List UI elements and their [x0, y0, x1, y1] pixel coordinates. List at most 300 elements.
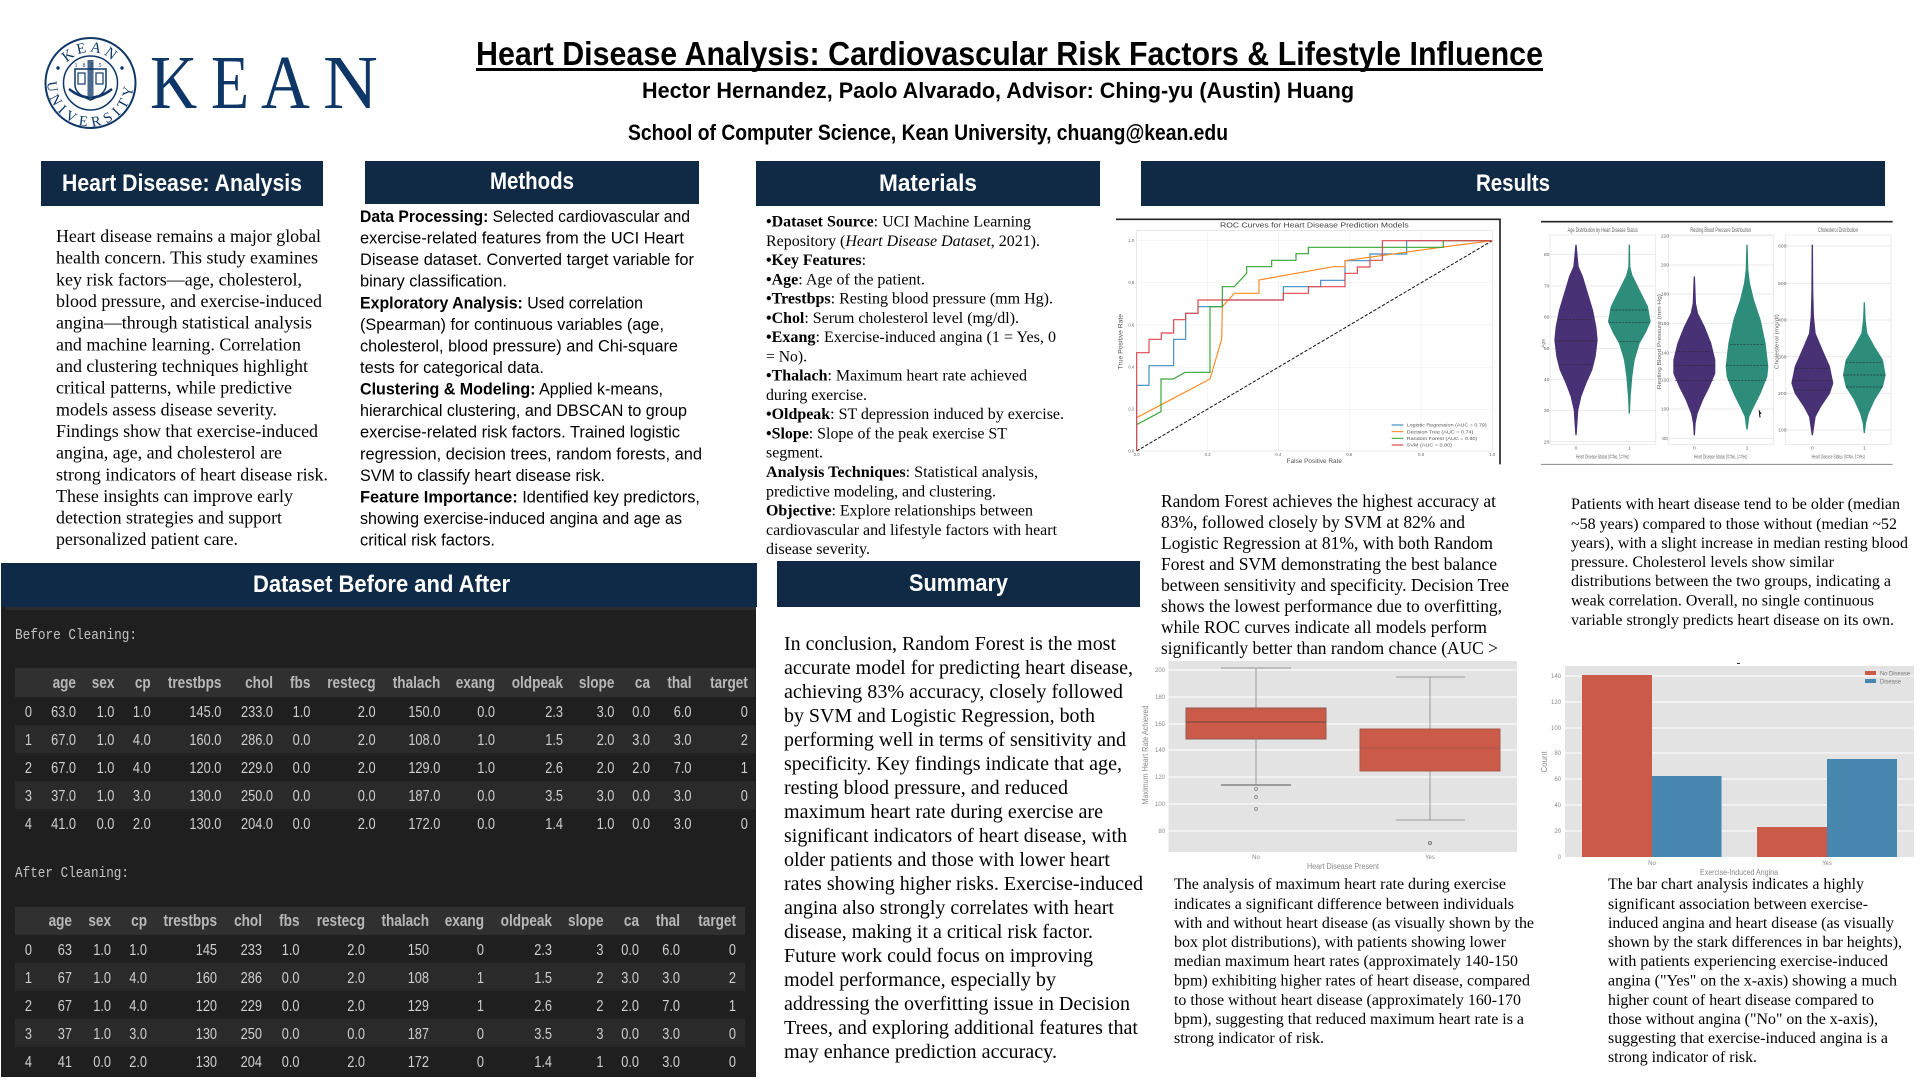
- chart: violin plots: 30: [1544, 408, 1550, 414]
- table: before cleaning: 0.0: [358, 788, 376, 805]
- table: before cleaning: 2: [25, 760, 32, 777]
- icon: university seal: 1855: [74, 63, 106, 69]
- table: before cleaning: 160.0: [189, 732, 221, 749]
- table: after cleaning: 130: [196, 1026, 217, 1043]
- table: before cleaning: 0.0: [632, 816, 650, 833]
- violin: cholesterol no disease: [1792, 245, 1833, 435]
- text block: introduction: angina, age, and cholesterol are: [56, 443, 282, 463]
- heading: Materials: Materials: [879, 170, 977, 197]
- text block: bar chart commentary: The bar chart analysis indicates a highly: [1608, 876, 1864, 893]
- chart: violin plots: 1: [1628, 445, 1631, 451]
- text block: box plot commentary: bpm) exhibiting higher rates of heart disease, compared: [1174, 972, 1530, 990]
- wordmark: [150, 40, 378, 125]
- table: after cleaning: 2.3: [534, 942, 552, 959]
- chart: box plot of maximum heart rate: 180: [1155, 695, 1166, 701]
- table: before cleaning: 0.0: [293, 732, 310, 749]
- table: after cleaning: 0.0: [282, 1054, 300, 1071]
- table: before cleaning: 4: [25, 816, 32, 833]
- table: after cleaning: 150: [408, 942, 429, 959]
- table: before cleaning: 2.0: [358, 816, 376, 833]
- chart: box plot of maximum heart rate: 120: [1155, 775, 1166, 781]
- curve: SVM: [1137, 241, 1492, 451]
- table: after cleaning: 0.0: [282, 998, 300, 1015]
- table: before cleaning: 4.0: [133, 760, 151, 777]
- table: after cleaning: 3: [25, 1026, 32, 1043]
- text block: introduction: [56, 226, 328, 549]
- text block: methods: critical risk factors.: [360, 532, 495, 550]
- chart: violin plots: 0: [1575, 445, 1578, 451]
- violin: age disease: [1608, 245, 1650, 413]
- table: before cleaning: 120.0: [189, 760, 221, 777]
- table: after cleaning: 0: [729, 1026, 736, 1043]
- text block: bar chart commentary: [1608, 876, 1902, 1066]
- table: before cleaning: 2.6: [545, 760, 563, 777]
- table: after cleaning: 2.0: [347, 970, 365, 987]
- chart: bar chart of exercise-induced angina: 80: [1554, 751, 1562, 757]
- text block: summary: Trees, and exploring additional features that: [784, 1017, 1138, 1039]
- chart: violin plots: 1: [1863, 445, 1866, 451]
- table: after cleaning: 2: [25, 998, 32, 1015]
- table: after cleaning: 145: [196, 942, 217, 959]
- text block: materials: segment.: [766, 445, 823, 462]
- chart: ROC curves: 0.6: [1346, 452, 1353, 457]
- table: after cleaning: 229: [241, 998, 262, 1015]
- table: before cleaning: 0: [741, 816, 748, 833]
- table: before cleaning: oldpeak: [512, 674, 563, 692]
- text block: bar chart commentary: suggesting that exercise-induced angina is a: [1608, 1030, 1888, 1047]
- table: before cleaning: cp: [135, 674, 151, 692]
- text block: materials: cardiovascular and lifestyle factors with heart: [766, 522, 1058, 539]
- curve: random forest: [1137, 241, 1492, 425]
- table: after cleaning: target: [698, 912, 736, 930]
- text block: bar chart commentary: with patients experiencing exercise-induced: [1608, 953, 1888, 970]
- chart: violin plots: 160: [1661, 321, 1669, 327]
- table: after cleaning: 3.0: [662, 1054, 680, 1071]
- table: before cleaning: 1.0: [477, 732, 495, 749]
- panel: dataset before and after: [1, 563, 757, 1077]
- text block: ROC commentary: shows the lowest performance due to overfitting,: [1161, 596, 1502, 616]
- violin: cholesterol disease: [1843, 303, 1885, 433]
- label: before cleaning: Before Cleaning:: [15, 627, 137, 644]
- table: after cleaning: 130: [196, 1054, 217, 1071]
- chart: box plot of maximum heart rate: [1141, 661, 1517, 871]
- text block: methods: regression, decision trees, random forests, and: [360, 445, 702, 463]
- table: before cleaning: thalach: [393, 674, 440, 692]
- table: before cleaning: 1: [25, 732, 32, 749]
- table: after cleaning: 0.0: [282, 970, 300, 987]
- table: before cleaning: chol: [245, 674, 273, 692]
- chart: box plot of maximum heart rate: Maximum Heart Rate Achieved: [1141, 706, 1150, 804]
- table: after cleaning: 160: [196, 970, 217, 987]
- table: before cleaning: 2.0: [358, 760, 376, 777]
- table: after cleaning: 67: [58, 970, 72, 987]
- text block: methods: binary classification.: [360, 273, 507, 291]
- table: before cleaning: 286.0: [241, 732, 273, 749]
- chart: ROC curves: 0.2: [1128, 407, 1135, 412]
- text block: summary: performing well in terms of sensitivity and: [784, 729, 1126, 751]
- chart: violin plots: 60: [1544, 314, 1550, 320]
- table: before cleaning: 1.0: [133, 704, 151, 721]
- table: after cleaning: exang: [445, 912, 484, 930]
- icon: mouse cursor: [1759, 409, 1762, 417]
- table: before cleaning: 130.0: [189, 788, 221, 805]
- table: after cleaning: chol: [234, 912, 262, 930]
- table: after cleaning: 2: [596, 998, 604, 1015]
- table: after cleaning: age: [49, 912, 72, 930]
- table: after cleaning: 0: [729, 1054, 736, 1071]
- text block: introduction: angina—through statistical analysis: [56, 313, 312, 333]
- text block: summary: addressing the overfitting issue in Decision: [784, 993, 1130, 1015]
- text block: materials: Analysis Techniques: Statistical analysis,: [766, 464, 1038, 481]
- table: before cleaning: 108.0: [408, 732, 440, 749]
- text block: box plot commentary: strong indicator of risk.: [1174, 1030, 1324, 1047]
- text block: violin commentary: [1571, 496, 1908, 629]
- text block: materials: •Slope: Slope of the peak exercise ST: [766, 426, 1007, 442]
- table: after cleaning: 1: [729, 998, 736, 1015]
- text block: summary: resting blood pressure, and reduced: [784, 777, 1068, 799]
- table: after cleaning: 6.0: [662, 942, 680, 959]
- table: before cleaning: restecg: [327, 674, 376, 692]
- table: before cleaning: 0.0: [632, 704, 650, 721]
- violin: blood pressure no disease: [1674, 277, 1715, 435]
- table: after cleaning: 1.4: [534, 1054, 552, 1071]
- table: before cleaning: 1.0: [477, 760, 495, 777]
- text block: bar chart commentary: strong indicator of risk.: [1608, 1049, 1757, 1066]
- table: before cleaning: 3.0: [597, 788, 614, 805]
- chart: box plot of maximum heart rate: Yes: [1425, 855, 1435, 861]
- text block: materials: •Thalach: Maximum heart rate achieved: [766, 368, 1027, 385]
- table: before cleaning: 41.0: [51, 816, 76, 833]
- text block: introduction: and clustering techniques highlight: [56, 356, 308, 376]
- chart: violin plots: 100: [1778, 428, 1787, 434]
- table: before cleaning: age: [53, 674, 76, 692]
- table: after cleaning: 1.0: [129, 942, 147, 959]
- table: before cleaning: 2: [741, 732, 748, 749]
- text block: methods: cholesterol, blood pressure) and Chi-square: [360, 337, 678, 355]
- table: after cleaning: 0: [729, 942, 736, 959]
- text block: summary: [784, 633, 1143, 1063]
- table: after cleaning: 1.0: [93, 942, 111, 959]
- text block: methods: Disease dataset. Converted target variable for: [360, 251, 694, 269]
- table: before cleaning: 3.0: [632, 732, 650, 749]
- text block: ROC commentary: [1161, 491, 1509, 658]
- chart: ROC curves: 0.4: [1275, 452, 1282, 457]
- table: before cleaning: 2.0: [632, 760, 650, 777]
- heading: Materials: [756, 161, 1100, 206]
- text block: box plot commentary: median maximum heart rates (approximately 140-150: [1174, 953, 1518, 970]
- table: after cleaning: fbs: [279, 912, 300, 930]
- text block: materials: [766, 214, 1064, 558]
- text block: violin commentary: Patients with heart disease tend to be older (median: [1571, 496, 1900, 513]
- text block: ROC commentary: Forest and SVM demonstrating the best balance: [1161, 554, 1497, 574]
- chart: bar chart of exercise-induced angina: 140: [1551, 674, 1562, 680]
- chart: violin plots: 180: [1661, 292, 1669, 298]
- chart: ROC curves: 0.4: [1128, 365, 1135, 370]
- chart: violin plots: Cholesterol Distribution: [1818, 227, 1858, 234]
- table: before cleaning: 0.0: [97, 816, 114, 833]
- table: before cleaning: 3: [25, 788, 32, 805]
- table: before cleaning: 1.0: [97, 760, 114, 777]
- curve: logistic regression: [1137, 241, 1492, 451]
- table: before cleaning: 250.0: [241, 788, 273, 805]
- legend: Logistic Regression (AUC = 0.79): [1407, 423, 1487, 428]
- text block: introduction: These insights can improve early: [56, 486, 293, 506]
- text block: methods: Data Processing: Selected cardiovascular and: [360, 208, 690, 226]
- text block: ROC commentary: while ROC curves indicate all models perform: [1161, 617, 1487, 637]
- table: after cleaning: 1.0: [93, 1026, 111, 1043]
- table: before cleaning: 3.0: [674, 732, 692, 749]
- text block: materials: disease severity.: [766, 541, 870, 558]
- table: before cleaning: 7.0: [674, 760, 692, 777]
- chart: violin plots: 80: [1662, 436, 1668, 442]
- legend: [1865, 671, 1911, 686]
- table: after cleaning: thal: [656, 912, 680, 930]
- text block: materials: •Dataset Source: UCI Machine Learning: [766, 214, 1031, 230]
- legend: No Disease: [1880, 672, 1911, 678]
- table: after cleaning: 187: [408, 1026, 429, 1043]
- text block: materials: predictive modeling, and clustering.: [766, 483, 996, 500]
- text block: summary: In conclusion, Random Forest is the most: [784, 633, 1116, 655]
- text block: methods: SVM to classify heart disease risk.: [360, 467, 605, 485]
- table: before cleaning: 3.0: [674, 788, 692, 805]
- chart: bar chart of exercise-induced angina: 100: [1551, 726, 1562, 732]
- chart: violin plots: 140: [1661, 350, 1669, 356]
- logo: Kean University: [44, 37, 378, 129]
- table: after cleaning: 7.0: [662, 998, 680, 1015]
- text block: summary: maximum heart rate during exercise are: [784, 801, 1103, 823]
- table: after cleaning: 1.0: [93, 998, 111, 1015]
- chart: violin plots: Resting Blood Pressure (mm Hg): [1657, 294, 1663, 389]
- wordmark: K: [150, 42, 197, 125]
- table: after cleaning: 63: [58, 942, 72, 959]
- chart: violin plots: 20: [1544, 439, 1550, 445]
- legend: SVM (AUC = 0.80): [1407, 443, 1453, 448]
- chart: violin plots: 0: [1811, 445, 1814, 451]
- chart: box plot of maximum heart rate: No: [1252, 855, 1260, 861]
- text block: violin commentary: weak correlation. Overall, no single continuous: [1571, 592, 1874, 610]
- curve: decision tree: [1137, 241, 1492, 418]
- chart: bar chart of exercise-induced angina: [1540, 663, 1914, 877]
- table: before cleaning: 1.0: [293, 704, 310, 721]
- text block: methods: Clustering & Modeling: Applied k-means,: [360, 381, 663, 399]
- table: before cleaning: 0: [741, 704, 748, 721]
- chart: violin plots: 120: [1661, 378, 1669, 384]
- table: after cleaning: 1: [25, 970, 32, 987]
- heading: Methods: Methods: [490, 168, 574, 195]
- text block: ROC commentary: Random Forest achieves the highest accuracy at: [1161, 491, 1496, 511]
- table: after cleaning: 3.0: [662, 970, 680, 987]
- title: Heart Disease Analysis: Cardiovascular Risk Factors & Lifestyle Influence: [476, 35, 1543, 72]
- table: before cleaning: 150.0: [408, 704, 440, 721]
- table: after cleaning: 204: [241, 1054, 262, 1071]
- heading: Summary: Summary: [909, 570, 1009, 597]
- table: after cleaning: 120: [196, 998, 217, 1015]
- text block: introduction: Heart disease remains a major global: [56, 226, 321, 246]
- text block: bar chart commentary: induced angina and heart disease (as visually: [1608, 915, 1894, 932]
- table: before cleaning: 1.0: [597, 816, 614, 833]
- table: after cleaning: 4: [25, 1054, 32, 1071]
- table: before cleaning: 1.4: [545, 816, 563, 833]
- chart: bar chart of exercise-induced angina: 20: [1554, 829, 1562, 835]
- table: after cleaning: 250: [241, 1026, 262, 1043]
- table: after cleaning: cp: [131, 912, 147, 930]
- table: before cleaning: 2.0: [597, 760, 614, 777]
- text block: box plot commentary: bpm), suggesting that reduced maximum heart rate is a: [1174, 1011, 1524, 1028]
- label: after cleaning: After Cleaning:: [15, 865, 129, 882]
- table: after cleaning: 233: [241, 942, 262, 959]
- table: after cleaning: 3: [596, 942, 604, 959]
- text block: summary: model performance, especially by: [784, 969, 1056, 991]
- chart: violin plots: 200: [1778, 391, 1787, 397]
- table: before cleaning: 172.0: [408, 816, 440, 833]
- text block: bar chart commentary: significant association between exercise-: [1608, 896, 1868, 913]
- table: before cleaning: 145.0: [189, 704, 221, 721]
- heading: Heart Disease: Analysis: [41, 161, 323, 206]
- table: after cleaning: slope: [568, 912, 604, 930]
- table: before cleaning: ca: [635, 674, 650, 692]
- text block: summary: rates showing higher risks. Exercise-induced: [784, 873, 1143, 895]
- table: after cleaning: 0.0: [93, 1054, 111, 1071]
- table: before cleaning: 204.0: [241, 816, 273, 833]
- table: before cleaning: trestbps: [168, 674, 221, 692]
- icon: university seal: KEAN: [60, 42, 118, 62]
- text block: box plot commentary: to those without heart disease (approximately 160-170: [1174, 992, 1521, 1009]
- table: before cleaning: [15, 668, 755, 833]
- text block: introduction: health concern. This study examines: [56, 248, 318, 268]
- chart: violin plots: 300: [1778, 354, 1787, 360]
- text block: introduction: critical patterns, while predictive: [56, 378, 292, 398]
- chart: ROC curves: 0.6: [1128, 322, 1135, 327]
- chart: violin plots: 220: [1661, 233, 1669, 239]
- chart: box plot of maximum heart rate: Heart Disease Present: [1307, 862, 1380, 871]
- table: before cleaning: 6.0: [674, 704, 692, 721]
- text block: summary: Future work could focus on improving: [784, 945, 1093, 967]
- text block: summary: may enhance prediction accuracy.: [784, 1041, 1057, 1063]
- chart: violin plots: 50: [1544, 346, 1550, 352]
- text block: summary: accurate model for predicting heart disease,: [784, 657, 1133, 679]
- text block: methods: tests for categorical data.: [360, 359, 544, 377]
- table: before cleaning: 233.0: [241, 704, 273, 721]
- chart: violin plots: Age Distribution by Heart Disease Status: [1568, 227, 1638, 234]
- table: after cleaning: 41: [58, 1054, 72, 1071]
- text block: methods: hierarchical clustering, and DBSCAN to group: [360, 402, 687, 420]
- table: before cleaning: 0.0: [293, 816, 310, 833]
- text block: box plot commentary: [1174, 876, 1534, 1047]
- text block: methods: [360, 208, 702, 550]
- table: after cleaning: 129: [408, 998, 429, 1015]
- chart: violin plots: Resting Blood Pressure Distribution: [1690, 227, 1751, 234]
- chart: bar chart of exercise-induced angina: 0: [1558, 855, 1562, 861]
- text block: materials: = No).: [766, 348, 807, 365]
- heading: Dataset Before and After: [1, 563, 757, 607]
- chart: violin plots: Heart Disease Status (0=No, 1=Yes): [1576, 455, 1629, 461]
- text block: introduction: and machine learning. Correlation: [56, 334, 301, 354]
- text block: box plot commentary: with and without heart disease (as visually shown by the: [1174, 915, 1534, 932]
- text block: materials: •Oldpeak: ST depression induced by exercise.: [766, 406, 1064, 423]
- chart: box plot of maximum heart rate: 160: [1155, 722, 1166, 728]
- chart: ROC curves: 0.2: [1205, 452, 1211, 457]
- table: after cleaning: 3.0: [129, 1026, 147, 1043]
- table: before cleaning: 3.0: [597, 704, 614, 721]
- table: after cleaning: 172: [408, 1054, 429, 1071]
- chart: violin plots: 600: [1778, 244, 1787, 250]
- table: before cleaning: 1.0: [97, 788, 114, 805]
- table: after cleaning: 1: [477, 998, 484, 1015]
- box: disease: [1360, 677, 1500, 844]
- legend: Decision Tree (AUC = 0.74): [1407, 429, 1474, 434]
- text block: violin commentary: ~58 years) compared to those without (median ~52: [1571, 516, 1897, 533]
- legend: [1392, 423, 1487, 448]
- chart: violin plots: Age: [1541, 339, 1547, 348]
- text block: box plot commentary: box plot distributions), with patients showing lower: [1174, 934, 1507, 951]
- chart: violin plots: 200: [1661, 263, 1669, 269]
- chart: violin plots: Heart Disease Status (0=No, 1=Yes): [1812, 455, 1865, 461]
- table: before cleaning: 0.0: [477, 816, 495, 833]
- text block: bar chart commentary: those without angina ("No" on the x-axis),: [1608, 1011, 1878, 1028]
- chart: ROC curves: 0.8: [1128, 280, 1135, 285]
- chart: box plot of maximum heart rate: 100: [1155, 802, 1166, 808]
- text block: materials: during exercise.: [766, 387, 867, 404]
- table: after cleaning: 286: [241, 970, 262, 987]
- table: after cleaning: 1: [596, 1054, 604, 1071]
- chart: ROC curves: False Positive Rate: [1287, 459, 1343, 465]
- heading: Results: Results: [1476, 170, 1550, 197]
- text block: summary: angina also strongly correlates with heart: [784, 897, 1114, 919]
- table: after cleaning: 0: [477, 942, 484, 959]
- text block: summary: older patients and those with lower heart: [784, 849, 1110, 871]
- table: before cleaning: 1: [741, 760, 748, 777]
- text block: methods: exercise-related features from the UCI Heart: [360, 230, 684, 248]
- text block: ROC commentary: 83%, followed closely by SVM at 82% and: [1161, 512, 1465, 532]
- text block: introduction: personalized patient care.: [56, 529, 238, 549]
- table: before cleaning: fbs: [290, 674, 310, 692]
- text block: summary: significant indicators of heart disease, with: [784, 825, 1127, 847]
- chart: violin plots: 1: [1746, 445, 1749, 451]
- text block: materials: •Exang: Exercise-induced angina (1 = Yes, 0: [766, 329, 1056, 346]
- chart: violin plots: 40: [1544, 377, 1550, 383]
- wordmark: A: [261, 40, 310, 125]
- table: after cleaning: restecg: [317, 912, 365, 930]
- table: before cleaning: 229.0: [241, 760, 273, 777]
- chart: bar chart of exercise-induced angina: Count: [1540, 751, 1549, 773]
- table: before cleaning: 130.0: [189, 816, 221, 833]
- text block: summary: specificity. Key findings indicate that age,: [784, 753, 1122, 775]
- table: after cleaning: 0.0: [621, 942, 639, 959]
- affiliation: School of Computer Science, Kean University, chuang@kean.edu: [628, 120, 1228, 145]
- chart: box plot of maximum heart rate: 80: [1158, 829, 1166, 835]
- chart: bar chart of exercise-induced angina: Exercise-Induced Angina: [1700, 868, 1778, 877]
- chart: ROC curves: 1.0: [1128, 238, 1135, 243]
- chart: violin plots: 100: [1661, 407, 1669, 413]
- text block: introduction: detection strategies and support: [56, 508, 282, 528]
- panel: methods: [360, 161, 702, 550]
- table: after cleaning: 2.0: [621, 998, 639, 1015]
- text block: materials: •Key Features:: [766, 252, 866, 269]
- violin: age no disease: [1555, 245, 1597, 435]
- table: before cleaning: 129.0: [408, 760, 440, 777]
- text block: materials: Repository (Heart Disease Dataset, 2021).: [766, 233, 1040, 250]
- text block: introduction: key risk factors—age, cholesterol,: [56, 269, 302, 289]
- text block: ROC commentary: significantly better than random chance (AUC >: [1161, 638, 1498, 658]
- table: after cleaning: ca: [624, 912, 639, 930]
- chart: bar chart of exercise-induced angina: No: [1648, 861, 1656, 867]
- table: after cleaning: 2.0: [347, 942, 365, 959]
- table: after cleaning: 0: [477, 1026, 484, 1043]
- text block: introduction: blood pressure, and exercise-induced: [56, 291, 322, 311]
- table: before cleaning: target: [710, 674, 748, 692]
- table: after cleaning: 1: [477, 970, 484, 987]
- table: after cleaning: trestbps: [163, 912, 217, 930]
